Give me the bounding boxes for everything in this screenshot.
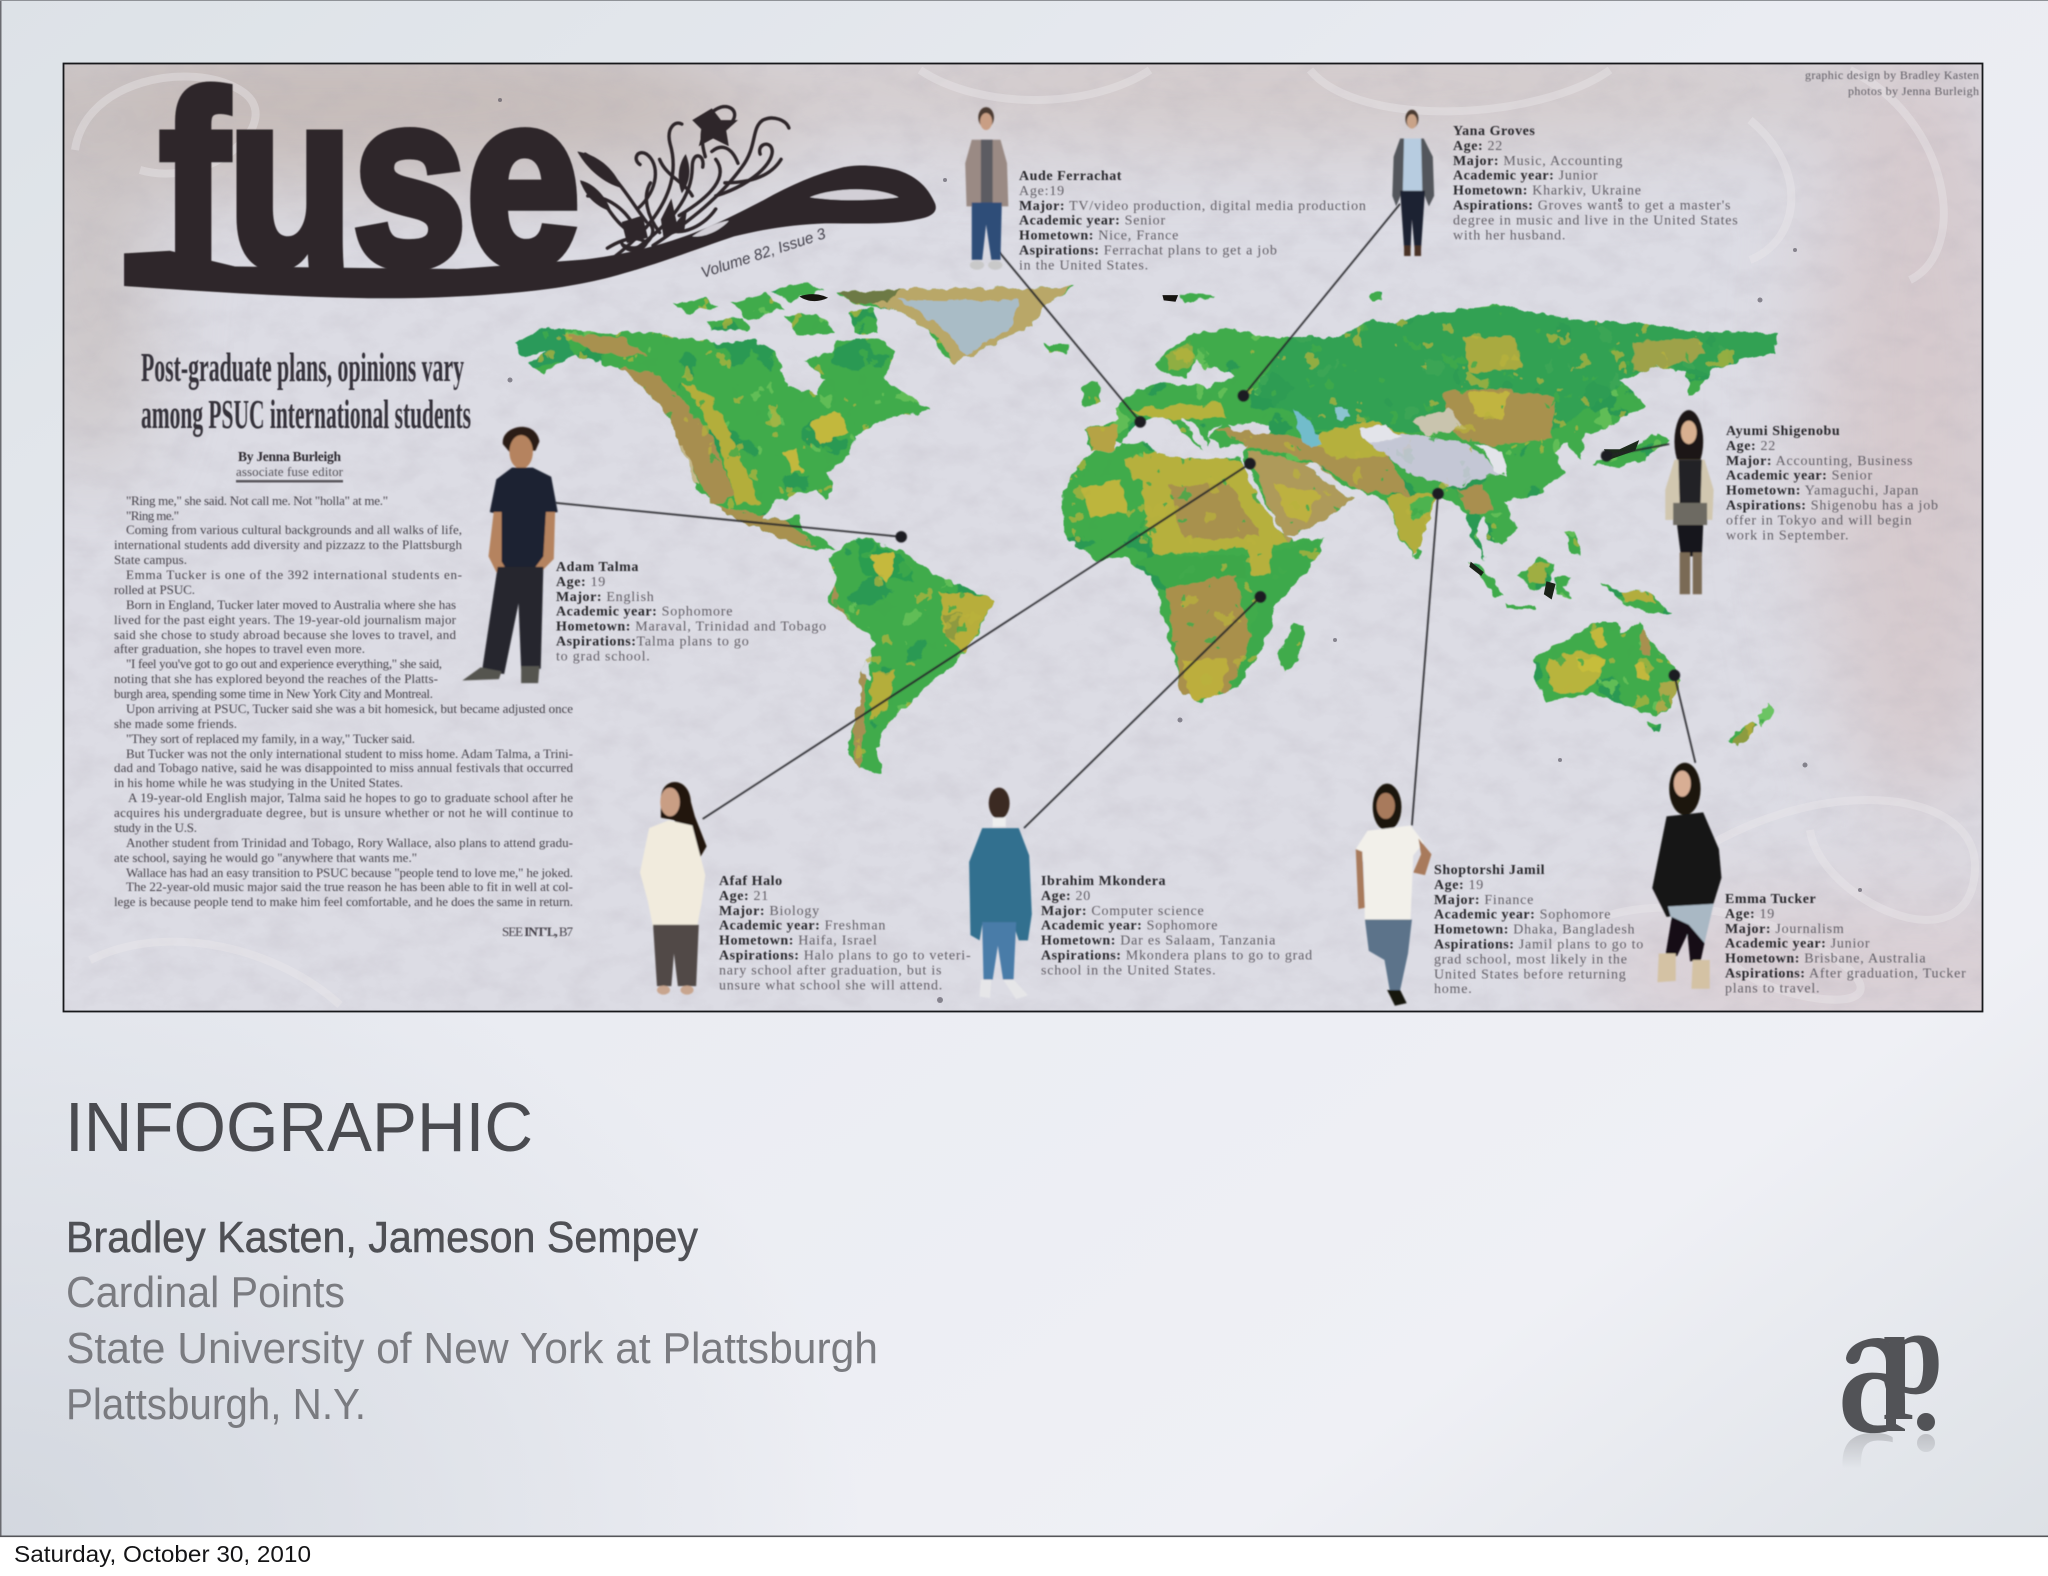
profile: Ayumi Shigenobu: Ayumi Shigenobu bbox=[1726, 424, 1840, 439]
profile: Shoptorshi Jamil: Hometown: Dhaka, Bangladesh bbox=[1434, 923, 1635, 938]
article body text: rolled at PSUC. bbox=[114, 582, 195, 597]
profile: Adam Talma: Aspirations:Talma plans to go bbox=[556, 634, 749, 650]
issue line: Volume 82, Issue 3 bbox=[699, 225, 828, 282]
profile: Afaf Halo: Age: 21 bbox=[719, 889, 769, 904]
profile: Ibrahim Mkondera: Aspirations: Mkondera plans to go to grad bbox=[1041, 948, 1313, 964]
profile: Shoptorshi Jamil: Aspirations: Jamil plans to go to bbox=[1434, 938, 1644, 952]
article body text: after graduation, she hopes to travel even more. bbox=[114, 641, 365, 656]
article body text: acquires his undergraduate degree, but is unsure whether or not he will continue to bbox=[114, 805, 573, 820]
article body text: she made some friends. bbox=[114, 716, 237, 731]
person: Aude Ferrachat bbox=[965, 107, 1008, 270]
profile: Ayumi Shigenobu: offer in Tokyo and will begin bbox=[1726, 513, 1912, 528]
profile: Ibrahim Mkondera: Major: Computer science bbox=[1041, 904, 1205, 919]
article body text: "Ring me," she said. Not call me. Not "holla" at me." bbox=[126, 493, 388, 508]
article body text: But Tucker was not the only international student to miss home. Adam Talma, a Trini- bbox=[126, 746, 573, 761]
byline: associate fuse editor bbox=[236, 464, 344, 479]
icon: ap logo: c bbox=[1838, 1406, 1896, 1545]
date footer: Saturday, October 30, 2010 bbox=[14, 1541, 311, 1567]
profile: Ibrahim Mkondera: Hometown: Dar es Salaam, Tanzania bbox=[1041, 934, 1276, 949]
profile: Yana Groves: Academic year: Junior bbox=[1453, 169, 1598, 184]
logo swash bbox=[124, 107, 936, 298]
person: Yana Groves bbox=[1392, 110, 1434, 256]
article body text: burgh area, spending some time in New York City and Montreal. bbox=[114, 686, 433, 701]
profile: Ayumi Shigenobu: Academic year: Senior bbox=[1726, 469, 1873, 484]
profile: Emma Tucker: plans to travel. bbox=[1725, 981, 1820, 996]
profile: Emma Tucker: Hometown: Brisbane, Australia bbox=[1725, 952, 1926, 967]
profile: Ayumi Shigenobu: Major: Accounting, Business bbox=[1726, 454, 1913, 469]
profile: Emma Tucker: Aspirations: After graduation, Tucker bbox=[1725, 966, 1967, 982]
profile: Aude Ferrachat: Academic year: Senior bbox=[1019, 214, 1166, 229]
profile: Ibrahim Mkondera: school in the United States. bbox=[1041, 963, 1216, 978]
person: Afaf Halo bbox=[640, 782, 707, 995]
article body text bbox=[114, 493, 574, 939]
profile: Yana Groves: Age: 22 bbox=[1453, 139, 1503, 154]
profile: Ayumi Shigenobu: Hometown: Yamaguchi, Japan bbox=[1726, 484, 1919, 499]
article body text: "Ring me." bbox=[126, 508, 179, 523]
profile: Shoptorshi Jamil: Major: Finance bbox=[1434, 893, 1534, 908]
profile: Afaf Halo: Academic year: Freshman bbox=[719, 919, 886, 934]
article body text: said she chose to study abroad because she loves to travel, and bbox=[114, 627, 456, 642]
article body text: The 22-year-old music major said the true reason he has been able to fit in well at col- bbox=[126, 879, 573, 894]
slide title: INFOGRAPHIC bbox=[65, 1088, 533, 1166]
profile: Yana Groves: Major: Music, Accounting bbox=[1453, 154, 1623, 169]
byline: By Jenna Burleigh bbox=[238, 449, 341, 464]
profile: Emma Tucker: Age: 19 bbox=[1725, 907, 1775, 922]
article body text: State campus. bbox=[114, 552, 187, 567]
world map bbox=[496, 274, 1802, 773]
profile: Ibrahim Mkondera: Age: 20 bbox=[1041, 889, 1091, 904]
article headline: among PSUC international students bbox=[141, 391, 471, 437]
profile: Shoptorshi Jamil: United States before returning bbox=[1434, 967, 1627, 982]
profile: Aude Ferrachat: Age:19 bbox=[1019, 184, 1065, 199]
profile: Aude Ferrachat: Aude Ferrachat bbox=[1019, 169, 1122, 184]
Caspian Sea bbox=[1293, 408, 1322, 449]
article body text: Born in England, Tucker later moved to Australia where she has bbox=[126, 597, 456, 612]
profile: Emma Tucker: Major: Journalism bbox=[1725, 922, 1845, 937]
profile: Emma Tucker: Emma Tucker bbox=[1725, 892, 1816, 907]
person: Ibrahim Mkondera bbox=[969, 788, 1032, 999]
article body text: Emma Tucker is one of the 392 international students en- bbox=[126, 567, 462, 582]
article body text: "I feel you've got to go out and experience everything," she said, bbox=[126, 656, 442, 671]
article body text: "They sort of replaced my family, in a way," Tucker said. bbox=[126, 731, 415, 746]
profile: Yana Groves: degree in music and live in the United States bbox=[1453, 213, 1738, 228]
people photos bbox=[462, 107, 1721, 1006]
panel: newspaper page bbox=[0, 20, 2048, 1050]
article body text: lived for the past eight years. The 19-year-old journalism major bbox=[114, 612, 457, 627]
article body text: in his home while he was studying in the United States. bbox=[114, 775, 403, 790]
connector lines and location dots bbox=[555, 204, 1695, 828]
article body text: ate school, saying he would go "anywhere that wants me." bbox=[114, 850, 417, 865]
person: Emma Tucker bbox=[1652, 763, 1721, 989]
profile: Adam Talma: to grad school. bbox=[556, 649, 651, 664]
profile: Yana Groves: with her husband. bbox=[1453, 228, 1566, 243]
profile: Ibrahim Mkondera: Academic year: Sophomore bbox=[1041, 919, 1218, 934]
profile: Aude Ferrachat: Major: TV/video production, digital media production bbox=[1019, 199, 1367, 214]
logo word: fuse bbox=[160, 42, 580, 316]
article body text: Upon arriving at PSUC, Tucker said she was a bit homesick, but became adjusted once bbox=[126, 701, 573, 716]
profile: Shoptorshi Jamil: Shoptorshi Jamil bbox=[1434, 863, 1545, 878]
byline bbox=[236, 449, 344, 482]
profile: Yana Groves: Yana Groves bbox=[1453, 124, 1535, 139]
publication details bbox=[66, 1268, 878, 1429]
article headline bbox=[141, 344, 471, 437]
photo credits bbox=[1805, 68, 1979, 98]
article body text: A 19-year-old English major, Talma said he hopes to go to graduate school after he bbox=[128, 790, 573, 805]
profile: Yana Groves: Hometown: Kharkiv, Ukraine bbox=[1453, 184, 1642, 199]
publication details: State University of New York at Plattsburgh bbox=[66, 1324, 878, 1373]
article body text: Wallace has had an easy transition to PSUC because "people tend to love me," he joked. bbox=[126, 865, 573, 880]
article body text: SEE INT'L, B7 bbox=[502, 924, 574, 939]
elevation colour patches bbox=[496, 274, 1802, 771]
photo credits: graphic design by Bradley Kasten bbox=[1805, 68, 1979, 82]
profile: Shoptorshi Jamil: Age: 19 bbox=[1434, 878, 1484, 893]
profile: Adam Talma: Age: 19 bbox=[556, 575, 606, 590]
panel border bbox=[64, 64, 1982, 1012]
publication details: Cardinal Points bbox=[66, 1268, 345, 1317]
profile: Adam Talma: Hometown: Maraval, Trinidad and Tobago bbox=[556, 620, 827, 635]
profile: Shoptorshi Jamil: Academic year: Sophomore bbox=[1434, 908, 1611, 923]
icon: ap logo: p bbox=[1883, 1285, 1943, 1420]
profile: Adam Talma: Academic year: Sophomore bbox=[556, 605, 733, 620]
person: Shoptorshi Jamil bbox=[1356, 784, 1432, 1006]
profile: Shoptorshi Jamil: home. bbox=[1434, 982, 1473, 997]
profile: Ayumi Shigenobu: Age: 22 bbox=[1726, 439, 1776, 454]
profile: Emma Tucker: Academic year: Junior bbox=[1725, 937, 1870, 952]
photo credits: photos by Jenna Burleigh bbox=[1848, 84, 1979, 98]
person: Ayumi Shigenobu bbox=[1665, 410, 1714, 594]
article body text: study in the U.S. bbox=[114, 820, 197, 835]
profile: Afaf Halo: unsure what school she will attend. bbox=[719, 978, 943, 993]
fuse logo bbox=[124, 42, 936, 316]
profile: Afaf Halo: Aspirations: Halo plans to go to veteri- bbox=[719, 948, 971, 964]
profile: Yana Groves: Aspirations: Groves wants to get a master's bbox=[1453, 198, 1731, 214]
article body text: noting that she has explored beyond the reaches of the Platts- bbox=[114, 671, 438, 686]
icon: ap logo bbox=[1842, 1336, 1939, 1460]
profile: Adam Talma: Major: English bbox=[556, 590, 655, 605]
profile: Adam Talma: Adam Talma bbox=[556, 560, 639, 575]
profile: Afaf Halo: Major: Biology bbox=[719, 904, 820, 919]
profile: Afaf Halo: nary school after graduation, but is bbox=[719, 963, 942, 978]
article body text: Coming from various cultural backgrounds and all walks of life, bbox=[126, 522, 462, 537]
article body text: dad and Tobago native, said he was disappointed to miss annual festivals that occurred bbox=[114, 760, 574, 775]
student profiles bbox=[556, 124, 1967, 997]
profile: Ayumi Shigenobu: work in September. bbox=[1726, 528, 1849, 543]
profile: Aude Ferrachat: Hometown: Nice, France bbox=[1019, 229, 1179, 244]
person: Adam Talma bbox=[462, 427, 558, 683]
icon: ap logo: c bbox=[1838, 1321, 1896, 1460]
profile: Aude Ferrachat: in the United States. bbox=[1019, 258, 1149, 273]
profile: Shoptorshi Jamil: grad school, most likely in the bbox=[1434, 952, 1628, 967]
article body text: international students add diversity and pizzazz to the Plattsburgh bbox=[114, 537, 462, 552]
Aral Sea bbox=[1335, 408, 1348, 418]
profile: Afaf Halo: Afaf Halo bbox=[719, 874, 783, 889]
land masses bbox=[513, 282, 1776, 773]
publication details: Plattsburgh, N.Y. bbox=[66, 1380, 366, 1429]
authors: Bradley Kasten, Jameson Sempey bbox=[66, 1213, 698, 1262]
profile: Ibrahim Mkondera: Ibrahim Mkondera bbox=[1041, 874, 1166, 889]
profile: Aude Ferrachat: Aspirations: Ferrachat plans to get a job bbox=[1019, 244, 1278, 258]
profile: Afaf Halo: Hometown: Haifa, Israel bbox=[719, 934, 878, 949]
article body text: Another student from Trinidad and Tobago, Rory Wallace, also plans to attend gradu- bbox=[126, 835, 573, 850]
profile: Ayumi Shigenobu: Aspirations: Shigenobu has a job bbox=[1726, 498, 1939, 514]
article body text: lege is because people tend to make him feel comfortable, and he does the same in return. bbox=[114, 894, 573, 909]
article headline: Post-graduate plans, opinions vary bbox=[141, 344, 464, 390]
